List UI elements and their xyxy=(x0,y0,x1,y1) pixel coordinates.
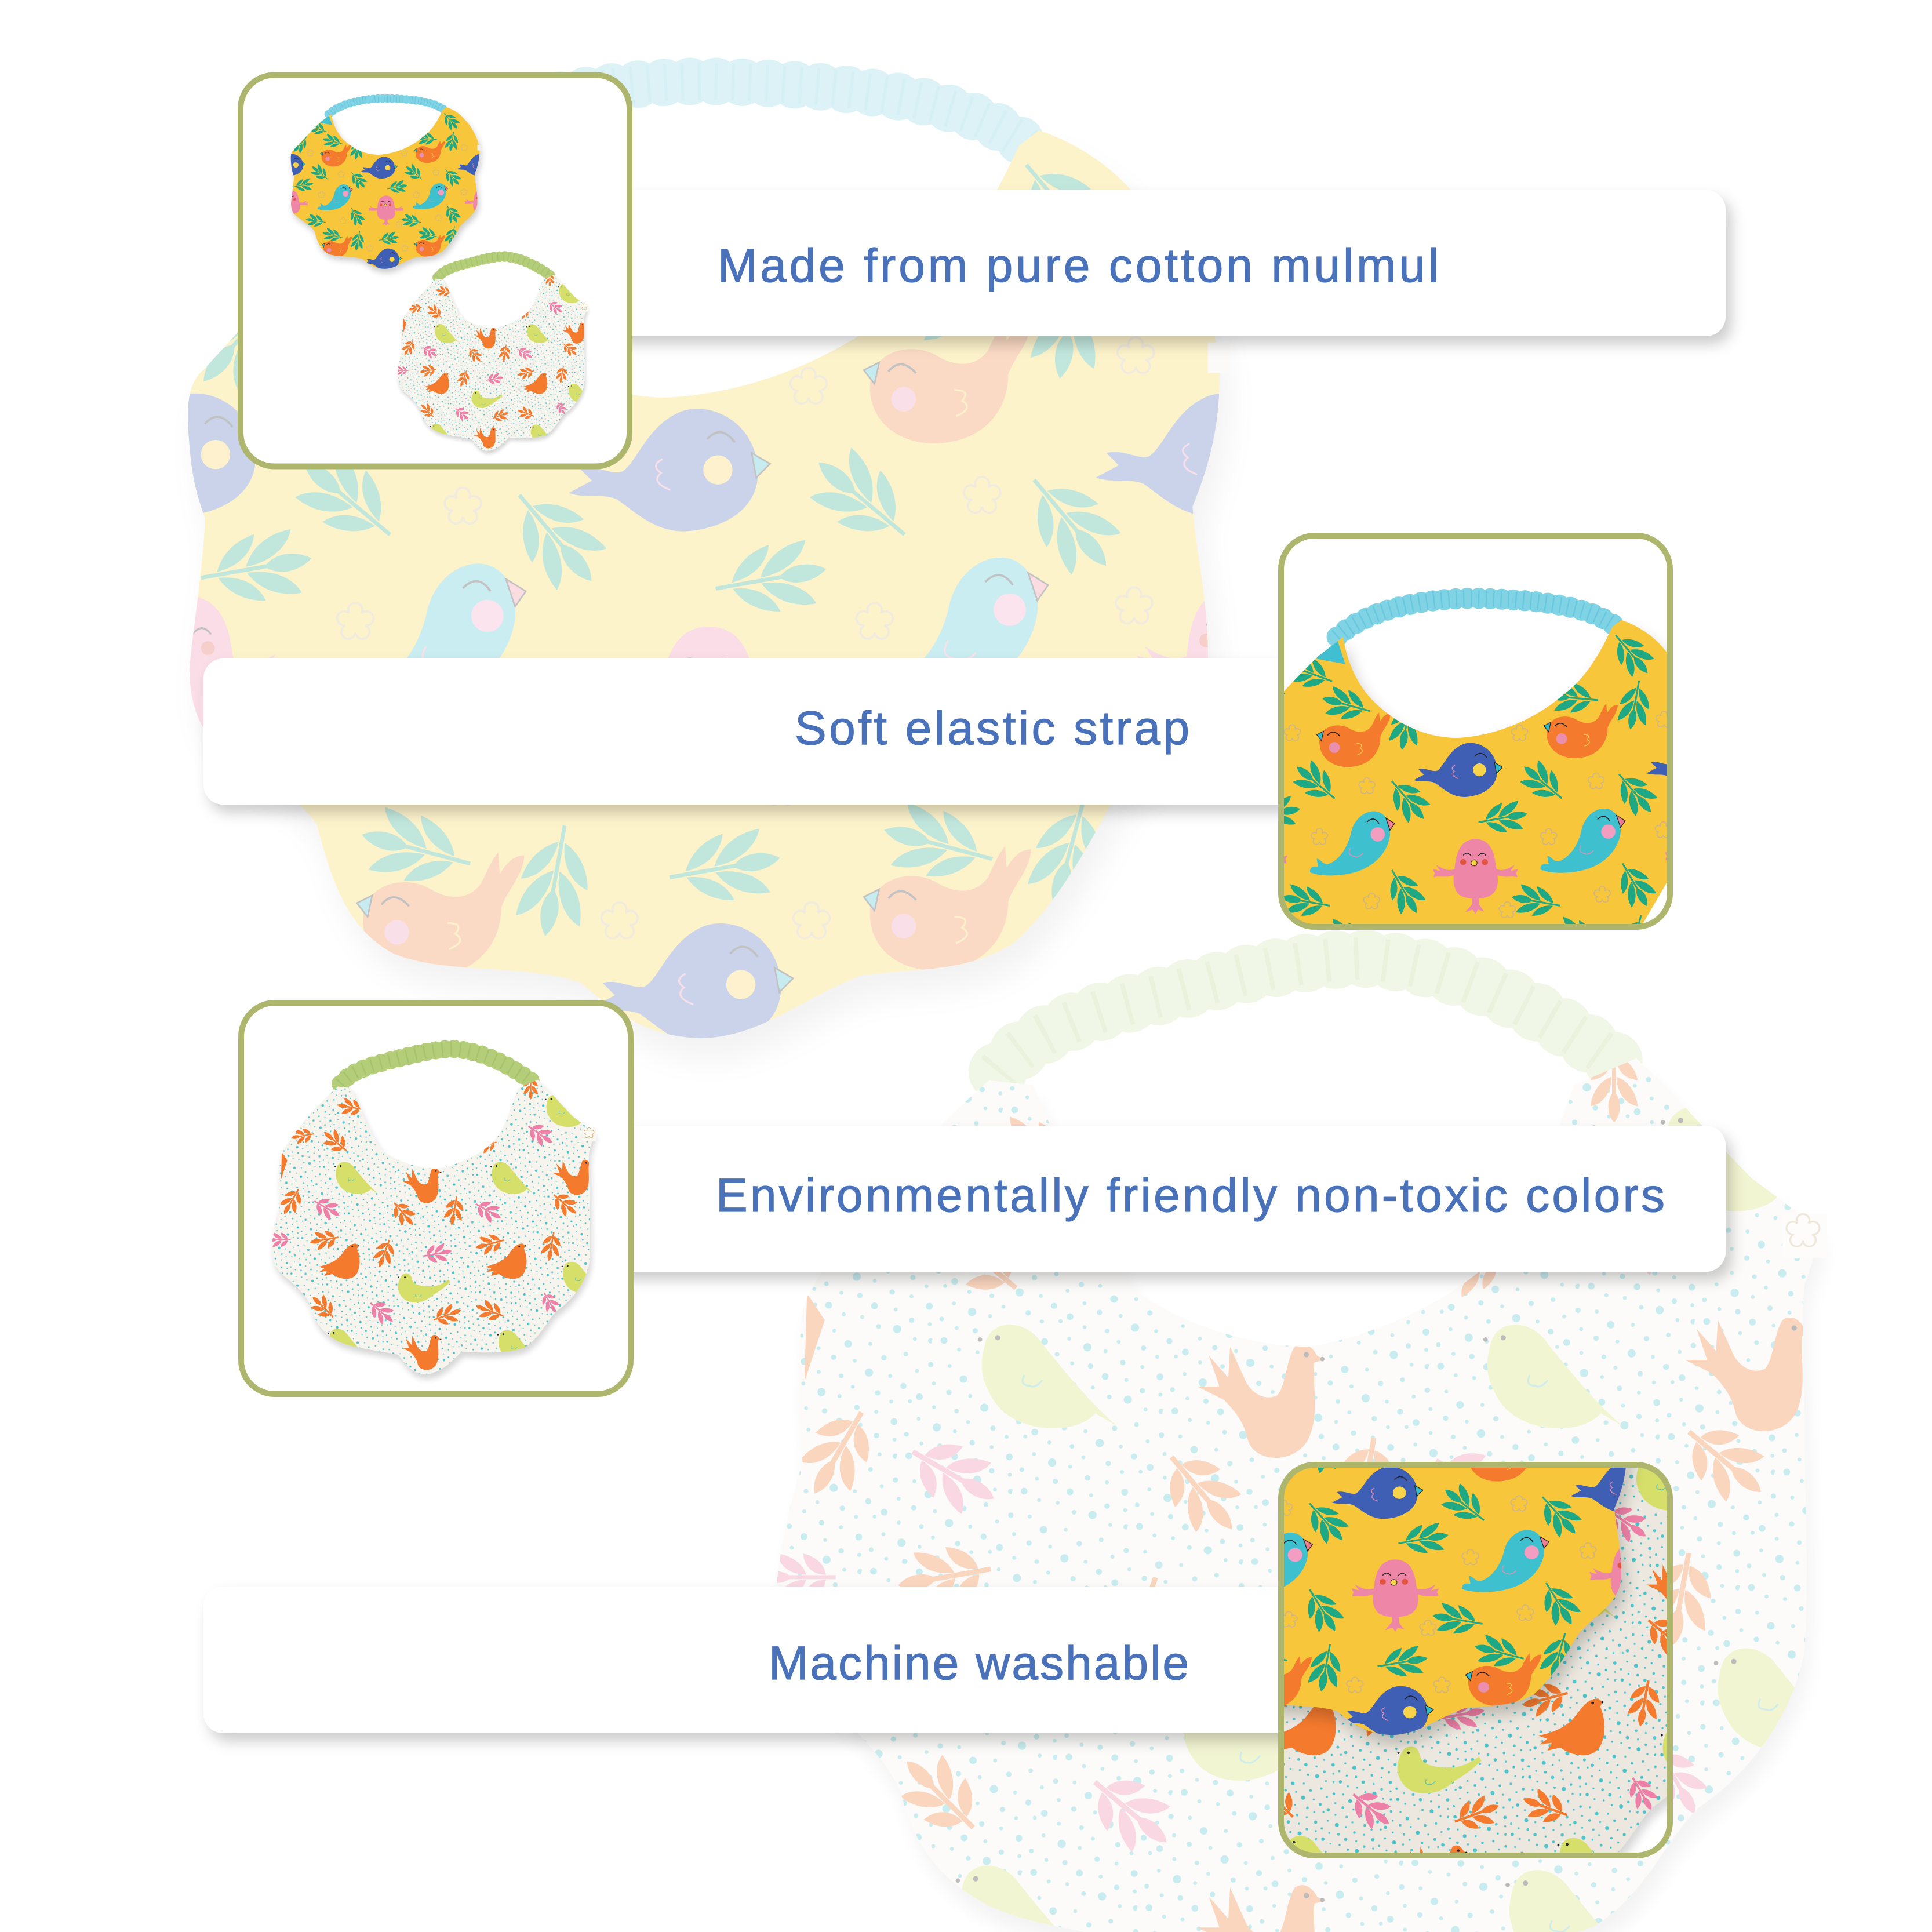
photo: floral bib xyxy=(394,256,594,454)
banner text: Made from pure cotton mulmul xyxy=(718,239,1439,292)
banner text: Environmentally friendly non-toxic colors xyxy=(716,1169,1665,1222)
photo: yellow bib close-up xyxy=(1284,588,1667,924)
photo: yellow bib xyxy=(290,94,484,275)
background: yellow bird bib xyxy=(67,81,1331,1083)
banner text: Soft elastic strap xyxy=(795,702,1189,755)
photo card: two bibs xyxy=(241,75,630,466)
photo card: elastic strap close-up xyxy=(1278,533,1673,930)
banner: Machine washable xyxy=(203,1587,1334,1733)
banner: Soft elastic strap xyxy=(203,658,1334,805)
photo card: fabric close-up xyxy=(1104,1327,1730,1917)
photo: floral bib full xyxy=(267,1049,605,1380)
banner: Environmentally friendly non-toxic colors xyxy=(551,1126,1726,1272)
photo card: floral bib xyxy=(241,1003,631,1394)
background: floral bird bib xyxy=(758,958,1854,1932)
photo: floral fabric xyxy=(1186,1385,1730,1917)
photo: yellow fabric overlapping xyxy=(1104,1327,1677,1754)
banner text: Machine washable xyxy=(769,1637,1189,1690)
banner: Made from pure cotton mulmul xyxy=(551,190,1726,336)
